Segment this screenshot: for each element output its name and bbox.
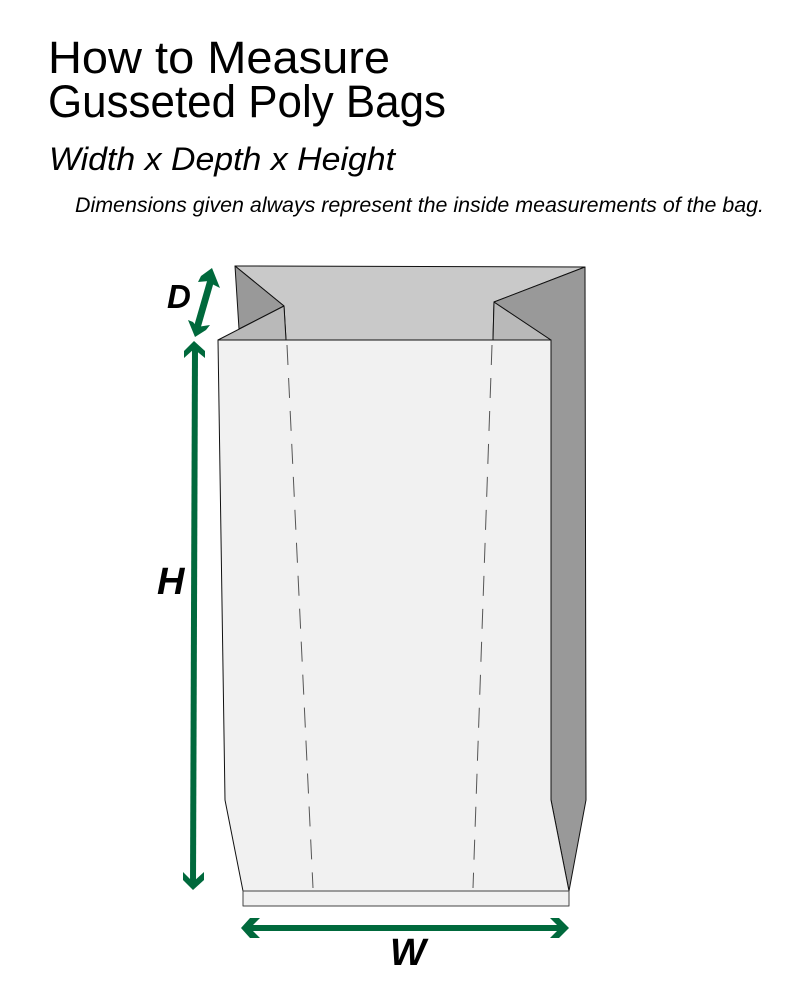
right fold dashed line: [473, 345, 492, 888]
front panel: [218, 340, 569, 891]
title: [48, 32, 446, 127]
bag diagram: [218, 266, 586, 906]
depth label: D: [167, 278, 191, 315]
back panel inside: [235, 266, 585, 340]
note: Dimensions given always represent the inside measurements of the bag.: [75, 194, 764, 217]
right gusset light: [493, 302, 551, 340]
depth arrow: [188, 268, 220, 337]
title: How to Measure: [48, 32, 390, 83]
title: Gusseted Poly Bags: [48, 76, 446, 127]
height arrow: [183, 341, 205, 890]
height label: H: [157, 561, 186, 603]
left fold dashed line: [287, 345, 313, 888]
bottom strip: [243, 891, 569, 906]
left gusset light: [218, 306, 286, 340]
subtitle: Width x Depth x Height: [49, 141, 396, 177]
width label: W: [390, 932, 429, 974]
width arrow: [241, 918, 569, 938]
left gusset dark: [235, 266, 284, 329]
right side panel: [494, 267, 586, 891]
